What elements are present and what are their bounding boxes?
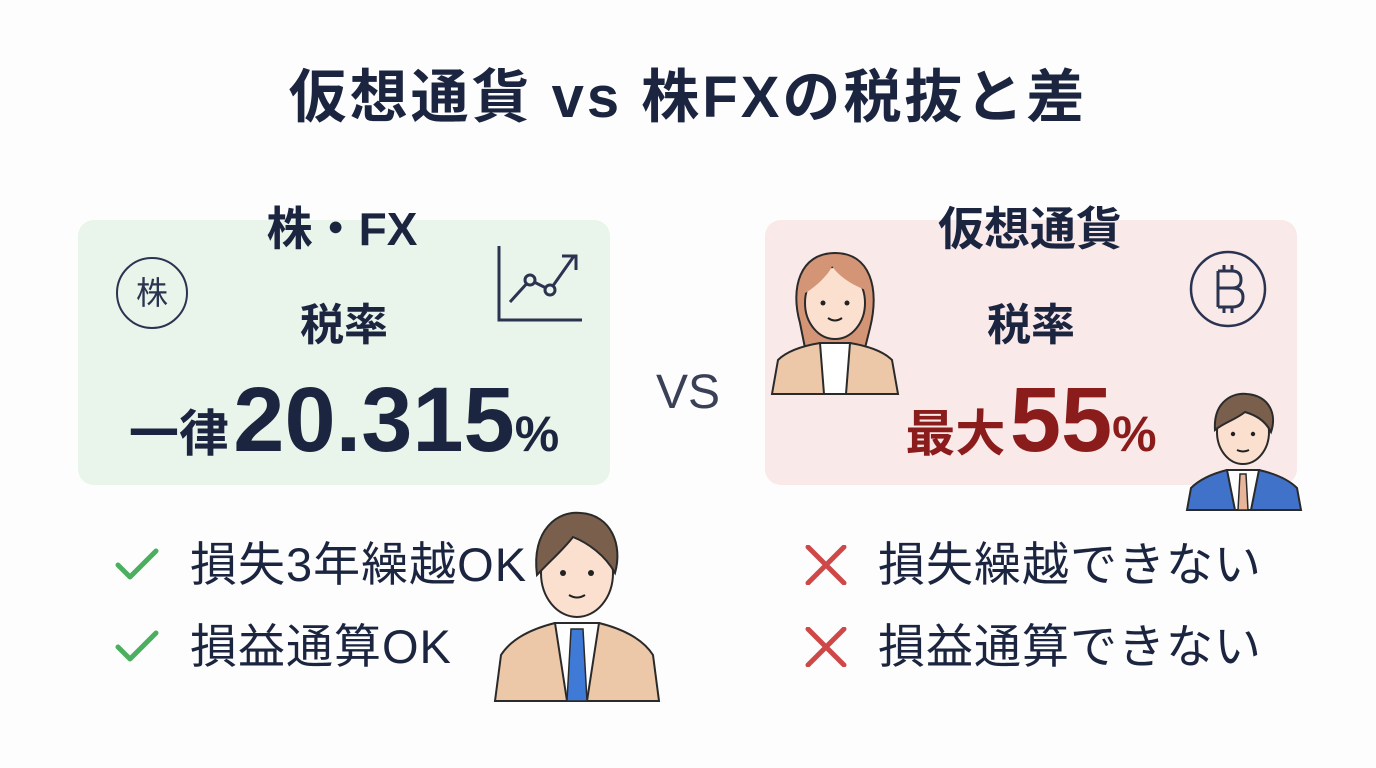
icon: kabu circle: 株 <box>136 275 168 311</box>
icon: kabu circle <box>116 257 188 329</box>
list: crypto drawbacks <box>806 538 1262 673</box>
heading: crypto: 仮想通貨 <box>938 203 1122 255</box>
item: no carry forward: 損失繰越できない <box>878 538 1262 591</box>
VS: VS <box>656 366 720 419</box>
heading: stocks/FX: 株・FX <box>267 203 417 255</box>
rate value: 一律 20.315% <box>129 369 559 471</box>
list: stocks benefits <box>116 538 527 673</box>
item: loss offset: 損益通算OK <box>190 620 452 673</box>
title: 仮想通貨 vs 株FXの税抜と差 <box>289 65 1087 130</box>
icon: man right <box>1186 392 1302 511</box>
icon: chart <box>498 246 582 322</box>
item: no offset: 損益通算できない <box>878 620 1262 673</box>
tax rate label: 税率 <box>300 301 388 350</box>
rate value: 最大 55% <box>905 369 1157 471</box>
icon: bitcoin <box>1190 250 1266 328</box>
panel: stocks/FX <box>78 220 610 485</box>
tax rate label: 税率 <box>987 301 1075 350</box>
item: loss carry forward: 損失3年繰越OK <box>190 538 527 591</box>
icon: woman <box>770 252 900 395</box>
icon: man bottom-left <box>494 512 660 702</box>
panel: crypto <box>765 220 1297 485</box>
